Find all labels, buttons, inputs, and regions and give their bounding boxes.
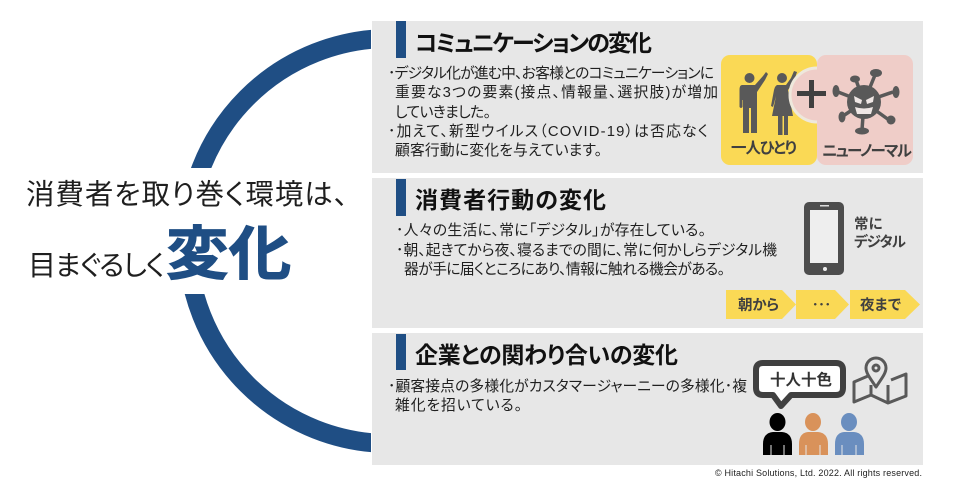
speech bubble: 十人十色: [770, 370, 832, 389]
heading: コミュニケーションの変化: [415, 30, 652, 56]
icon: smartphone: [804, 202, 844, 275]
body text: ･加えて、新型ウイルス（COVID-19）は否応なく: [388, 123, 708, 140]
body text: 重要な3つの要素(接点、情報量、選択肢)が増加: [395, 84, 718, 101]
body text: [388, 64, 718, 159]
label: always digital: デジタル: [854, 233, 907, 251]
main title: 消費者を取り巻く環境は、: [26, 179, 348, 211]
icon: blue person: [835, 413, 864, 455]
copyright: © Hitachi Solutions, Ltd. 2022. All rights reserved.: [715, 468, 922, 478]
body text: [396, 221, 777, 278]
main title: [26, 179, 348, 286]
arrow: continuing: [796, 290, 849, 319]
icon: black person: [763, 413, 792, 455]
heading: 企業との関わり合いの変化: [415, 342, 678, 368]
body text: ･デジタル化が進む中、お客様とのコミュニケーションに: [388, 64, 714, 82]
speech bubble: [756, 363, 843, 406]
body text: ･朝、起きてから夜、寝るまでの間に、常に何かしらデジタル機: [396, 241, 777, 259]
body text: していきました。: [395, 104, 491, 121]
arrow: until night: [850, 290, 920, 319]
blue arc: [184, 30, 371, 452]
icon: man: [740, 72, 768, 133]
main title: 変化: [166, 221, 291, 286]
body text: 顧客行動に変化を与えています。: [395, 142, 602, 159]
panel: consumer behaviour: [372, 178, 923, 328]
arrow: continuing: ･･･: [812, 297, 831, 312]
heading bar: [396, 21, 406, 58]
icon: virus: [832, 69, 900, 134]
label: 一人ひとり: [731, 139, 797, 157]
icon: individual card: [721, 55, 817, 165]
body text: ･顧客接点の多様化がカスタマージャーニーの多様化･複: [388, 377, 747, 395]
body text: [388, 377, 747, 414]
icon: map pin: [854, 358, 906, 403]
label: always digital: [854, 216, 907, 251]
label: ニューノーマル: [822, 143, 913, 160]
body text: 雑化を招いている。: [395, 397, 522, 414]
heading bar: [396, 334, 406, 370]
label: always digital: 常に: [854, 216, 883, 233]
main title: 目まぐるしく: [28, 250, 165, 281]
icon: orange person: [799, 413, 828, 455]
panel: relationship with companies: [372, 333, 923, 465]
icon: woman: [771, 71, 797, 135]
icon: plus: [788, 66, 826, 124]
heading: 消費者行動の変化: [415, 187, 606, 213]
arrow: until night: 夜まで: [860, 296, 901, 314]
panel: communication: [372, 21, 923, 173]
heading bar: [396, 179, 406, 216]
arrow: from morning: [726, 290, 796, 319]
icon: new normal card: [817, 55, 913, 165]
body text: 器が手に届くところにあり、情報に触れる機会がある。: [404, 261, 725, 278]
body text: ･人々の生活に、常に「デジタル」が存在している。: [396, 221, 706, 239]
arrow: from morning: 朝から: [738, 296, 779, 314]
